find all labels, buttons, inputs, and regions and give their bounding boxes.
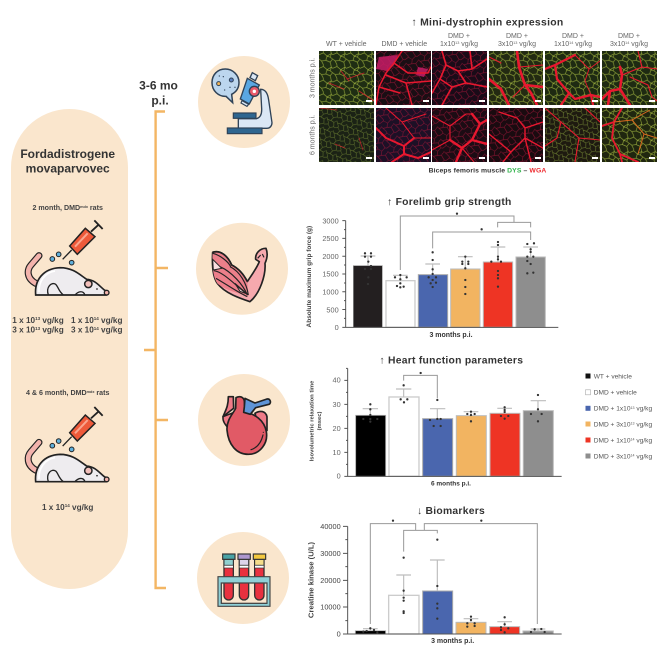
panel: forelimb grip strength chart — [306, 197, 558, 339]
micrograph: 3x10^13 3 months — [489, 51, 543, 105]
y axis tick labels: 40000 — [320, 522, 341, 531]
column labels: vg/kg — [459, 41, 478, 48]
panel: mini-dystrophin expression — [310, 18, 657, 174]
doses: 2 month cohort: 13 — [35, 326, 41, 331]
panel: biomarkers chart — [307, 506, 562, 645]
cohort label: 4 and 6 month: rats — [94, 389, 110, 397]
doses: 2 month cohort: vg/kg — [40, 326, 64, 335]
micrograph: WT 6 months — [319, 108, 374, 162]
legend: WT + vehicle — [594, 373, 632, 380]
bars — [353, 257, 545, 327]
cohort label: 4 and 6 month: mdx — [87, 390, 95, 394]
y axis tick labels: 10000 — [320, 603, 341, 612]
drug name heading second line: movaparvovec — [26, 161, 110, 175]
data points — [363, 385, 542, 426]
y axis tick labels: 10 — [333, 448, 341, 457]
legend: vg/kg — [635, 406, 652, 413]
doses: 2 month cohort: 13 — [35, 316, 41, 321]
x axis label: 6 months p.i. — [431, 480, 471, 487]
micrograph: 3x10^14 6 months — [602, 108, 657, 162]
column labels — [326, 33, 648, 48]
axes — [344, 368, 562, 476]
column labels: DMD + — [506, 33, 528, 40]
bracket connecting treatment to outcomes — [144, 112, 168, 588]
legend: vg/kg — [635, 437, 652, 444]
column labels: 14 — [569, 41, 573, 45]
legend: DMD + 3x10 — [594, 421, 631, 428]
row label: 3 months: 3 months p.i. — [310, 58, 316, 98]
icon: mouse receiving injection, 4 and 6 month cohort — [28, 407, 109, 482]
icon: microscope in circle — [198, 56, 290, 148]
significance markers — [457, 214, 482, 229]
micrograph: WT 3 months — [319, 51, 374, 105]
doses: 2 month cohort: 1 x 10 — [12, 316, 35, 325]
significance brackets — [370, 524, 537, 624]
cohort label: 2 month: mdx — [80, 205, 89, 209]
y axis tick labels: 30000 — [320, 549, 341, 558]
micrograph: DMD vehicle 3 months — [376, 51, 431, 105]
legend: DMD + vehicle — [594, 390, 637, 397]
column labels: 13 — [455, 41, 459, 45]
icon: mouse receiving injection, 2 month cohort — [28, 220, 109, 295]
data points — [363, 540, 545, 632]
column labels: DMD + — [562, 33, 584, 40]
y axis tick labels: 2000 — [322, 252, 339, 261]
doses: 2 month cohort: vg/kg — [40, 316, 64, 325]
legend: vg/kg — [635, 453, 652, 460]
heading: mini-dystrophin: ↑ Mini-dystrophin expression — [411, 18, 564, 28]
icon: flexed arm muscle in circle — [196, 223, 288, 315]
legend: 13 — [631, 406, 635, 410]
y axis title — [309, 380, 323, 461]
column labels: 3x10 — [610, 41, 625, 48]
column labels: vg/kg — [629, 41, 648, 48]
column labels: 3x10 — [498, 41, 513, 48]
micrograph: 1x10^14 6 months — [545, 108, 600, 162]
column labels: 1x10 — [440, 41, 455, 48]
dose: 4 and 6 month cohort: vg/kg — [70, 503, 93, 512]
drug name heading: Fordadistrogene — [20, 147, 115, 161]
y axis title: Absolute maximum grip force (g) — [306, 226, 313, 327]
icon: anatomical heart in circle — [198, 374, 290, 466]
y axis tick labels: 30 — [333, 400, 341, 409]
doses: 2 month cohort: 3 x 10 — [12, 326, 35, 335]
cohort label: 4 and 6 month: 4 & 6 month, DMD — [26, 389, 87, 397]
significance markers — [393, 517, 481, 524]
doses: 2 month cohort: vg/kg — [99, 316, 122, 325]
doses: 2 month cohort: vg/kg — [99, 326, 122, 335]
micrograph: 3x10^13 6 months — [489, 108, 543, 162]
y axis tick labels: 40 — [333, 376, 341, 385]
y axis tick labels: 20 — [333, 424, 341, 433]
y axis tick labels: 0 — [337, 472, 341, 481]
doses: 2 month cohort — [12, 316, 122, 335]
legend: 14 — [631, 454, 635, 458]
y axis tick labels — [320, 522, 341, 639]
timepoint label — [139, 78, 178, 108]
error bars — [363, 560, 545, 631]
significance bracket — [404, 375, 437, 398]
y axis tick labels: 1000 — [322, 287, 339, 296]
column labels: DMD + vehicle — [381, 41, 427, 48]
column labels: DMD + — [618, 33, 640, 40]
y axis tick labels: 500 — [326, 305, 339, 314]
legend: 14 — [631, 438, 635, 442]
legend: DMD + 3x10 — [594, 453, 631, 460]
caption: stain key: Biceps femoris muscle DYS – WGA — [429, 168, 546, 174]
significance brackets — [400, 216, 531, 270]
y axis tick labels: 2500 — [322, 234, 339, 243]
y axis title: Creatine kinase (U/L) — [307, 541, 316, 618]
micrograph: DMD vehicle 6 months — [376, 108, 431, 162]
column labels: 1x10 — [554, 41, 569, 48]
doses: 2 month cohort: 3 x 10 — [71, 326, 94, 335]
micrograph: 3x10^14 3 months — [602, 51, 657, 105]
y axis tick labels: 3000 — [322, 216, 339, 225]
y axis title: Isovolumetric relaxation time — [309, 380, 315, 461]
y axis tick labels — [322, 216, 339, 332]
column labels: DMD + — [448, 33, 470, 40]
axes — [343, 526, 562, 634]
timepoint label: 3-6 mo — [139, 78, 178, 92]
doses: 2 month cohort: 1 x 10 — [71, 316, 94, 325]
legend — [586, 373, 652, 460]
x axis label: 3 months p.i. — [429, 332, 473, 339]
column labels: vg/kg — [517, 41, 536, 48]
icon: test tubes in circle — [197, 532, 289, 624]
cohort label: 2 month: rats — [88, 204, 103, 212]
doses: 2 month cohort: 14 — [94, 326, 99, 331]
heading: biomarkers: ↓ Biomarkers — [417, 506, 485, 517]
doses: 2 month cohort: 14 — [94, 316, 99, 321]
bars — [355, 591, 553, 634]
micrograph: 1x10^13 3 months — [432, 51, 487, 105]
y axis tick labels — [333, 376, 341, 481]
legend: vg/kg — [635, 421, 652, 428]
panel: treatment pill — [11, 109, 128, 589]
micrograph: 1x10^14 3 months — [545, 51, 600, 105]
micrograph: 1x10^13 6 months — [432, 108, 487, 162]
dose: 4 and 6 month cohort: 14 — [65, 503, 70, 508]
y axis tick labels: 0 — [337, 630, 341, 639]
heading: heart function parameters: ↑ Heart function parameters — [379, 355, 523, 366]
y axis tick labels: 1500 — [322, 270, 339, 279]
column labels: 14 — [625, 41, 629, 45]
legend: DMD + 1x10 — [594, 437, 631, 444]
column labels: 13 — [513, 41, 517, 45]
dose: 4 and 6 month cohort: 1 x 10 — [42, 503, 65, 512]
x axis label: 3 months p.i. — [431, 638, 474, 645]
cohort label: 2 month: 2 month, DMD — [32, 204, 80, 212]
column labels: vg/kg — [573, 41, 592, 48]
bars — [356, 397, 553, 476]
error bars — [361, 247, 538, 281]
legend: 13 — [631, 422, 635, 426]
y axis tick labels: 20000 — [320, 576, 341, 585]
error bars — [363, 389, 546, 419]
data points — [365, 242, 534, 294]
significance marker — [417, 369, 424, 376]
row label: 6 months: 6 months p.i. — [310, 115, 316, 155]
y axis tick labels: 0 — [335, 323, 339, 332]
column labels: WT + vehicle — [326, 41, 367, 48]
axes — [342, 221, 558, 327]
legend: DMD + 1x10 — [594, 406, 631, 413]
y axis title: (msec) — [317, 412, 323, 430]
timepoint label: p.i. — [151, 94, 169, 108]
heading: forelimb grip strength: ↑ Forelimb grip strength — [387, 197, 512, 208]
panel: heart function chart — [309, 355, 562, 487]
